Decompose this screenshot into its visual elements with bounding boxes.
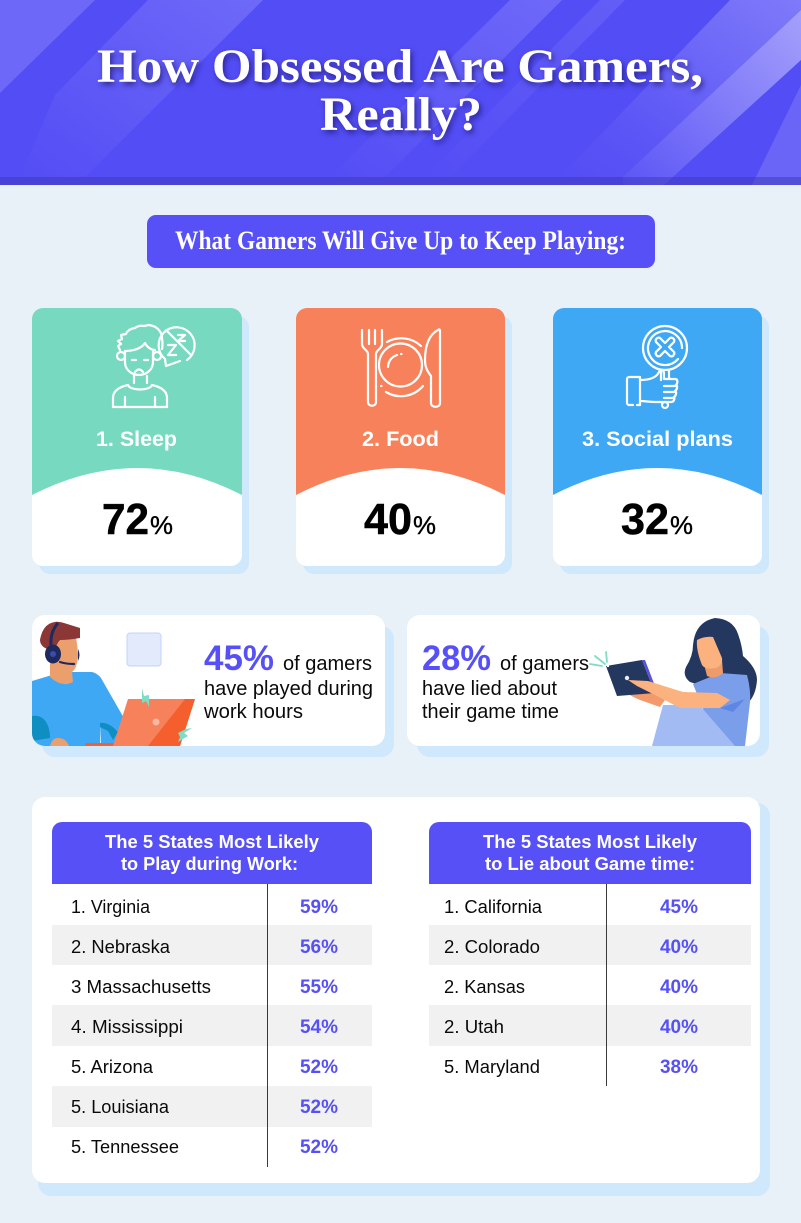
table header: lie about game time: to Lie about Game time:	[485, 853, 695, 874]
stat text: 45%: of gamers	[283, 653, 372, 675]
subtitle pill	[147, 215, 655, 268]
stat text: 28%: have lied about	[422, 678, 557, 700]
row: Arizona: 52%	[300, 1057, 338, 1078]
label: social plans: 3. Social plans	[582, 427, 733, 451]
icon: sleepy gamer	[113, 325, 195, 407]
row: Nebraska: 56%	[300, 937, 338, 958]
row: Utah	[444, 1016, 698, 1038]
illustration: gamer with headset and laptop	[32, 622, 195, 746]
row: Tennessee	[71, 1136, 338, 1158]
row: Kansas	[444, 976, 698, 998]
row: Louisiana: 5. Louisiana	[71, 1096, 170, 1117]
panel: played during work	[32, 615, 394, 757]
panel: state tables	[32, 797, 770, 1196]
stat text: 28%	[422, 639, 589, 723]
title: How Obsessed Are Gamers,	[97, 41, 703, 93]
label: sleep: 1. Sleep	[96, 427, 177, 451]
row: Mississippi: 4. Mississippi	[71, 1016, 183, 1037]
stat text: 45%: work hours	[203, 701, 303, 723]
table: states most likely to play during work	[52, 822, 372, 1167]
value: 72%	[102, 496, 173, 544]
row: Kansas: 40%	[660, 977, 698, 998]
title	[97, 41, 703, 141]
row: Kansas: 2. Kansas	[444, 976, 525, 997]
stat text: 28%: 28%	[422, 639, 491, 678]
illustration: woman with tablet	[590, 618, 757, 746]
row: Virginia	[71, 896, 338, 918]
row: California	[444, 896, 698, 918]
row: California: 45%	[660, 897, 698, 918]
row: Arizona	[71, 1056, 338, 1078]
panel: food card	[296, 308, 512, 574]
row: Mississippi: 54%	[300, 1017, 338, 1038]
row: Colorado: 2. Colorado	[444, 936, 540, 957]
row: Colorado: 40%	[660, 937, 698, 958]
value: 32%	[621, 496, 693, 544]
header banner	[0, 0, 801, 185]
value: 72%: 72	[102, 496, 149, 544]
table header: play during work	[52, 822, 372, 884]
icon: plate and cutlery	[362, 329, 440, 407]
row: Maryland	[444, 1056, 698, 1078]
stat text: 45%: have played during	[204, 678, 373, 700]
title: Really?	[320, 89, 482, 141]
row: Utah: 40%	[660, 1017, 698, 1038]
icon: magnifier with cross in hand	[627, 326, 687, 408]
value: 40%	[364, 496, 436, 544]
row: Virginia: 1. Virginia	[71, 896, 151, 917]
row: Massachusetts: 55%	[300, 977, 338, 998]
table header: play during work: The 5 States Most Likely	[105, 831, 320, 852]
stat text: 45%	[203, 639, 373, 723]
row: Utah: 2. Utah	[444, 1016, 504, 1037]
label: food: 2. Food	[362, 427, 439, 451]
subtitle pill: What Gamers Will Give Up to Keep Playing:	[175, 226, 626, 255]
row: Colorado	[444, 936, 698, 958]
table: states most likely to lie about game time	[429, 822, 751, 1086]
value: 40%: %	[413, 512, 436, 540]
panel: social plans card	[553, 308, 769, 574]
value: 40%: 40	[364, 496, 412, 544]
row: Maryland: 38%	[660, 1057, 698, 1078]
table header: lie about game time: The 5 States Most Likely	[483, 831, 698, 852]
row: Nebraska	[71, 936, 338, 958]
table header: lie about game time	[429, 822, 751, 884]
row: Tennessee: 5. Tennessee	[71, 1136, 179, 1157]
row: Louisiana	[71, 1096, 338, 1118]
value: 32%: 32	[621, 496, 669, 544]
row: Virginia: 59%	[300, 897, 338, 918]
panel: sleep card	[32, 308, 249, 574]
row: Maryland: 5. Maryland	[444, 1056, 540, 1077]
table header: play during work: to Play during Work:	[121, 853, 298, 874]
row: Massachusetts: 3 Massachusetts	[71, 976, 211, 997]
row: Mississippi	[71, 1016, 338, 1038]
row: Louisiana: 52%	[300, 1097, 338, 1118]
row: Tennessee: 52%	[300, 1137, 338, 1158]
panel: lied about game time	[407, 615, 769, 757]
stat text: 28%: of gamers	[500, 653, 589, 675]
value: 72%: %	[150, 512, 173, 540]
row: Arizona: 5. Arizona	[71, 1056, 154, 1077]
row: Nebraska: 2. Nebraska	[71, 936, 171, 957]
stat text: 28%: their game time	[422, 701, 559, 723]
row: Massachusetts	[71, 976, 338, 998]
row: California: 1. California	[444, 896, 543, 917]
stat text: 45%: 45%	[204, 639, 274, 678]
value: 32%: %	[670, 512, 693, 540]
